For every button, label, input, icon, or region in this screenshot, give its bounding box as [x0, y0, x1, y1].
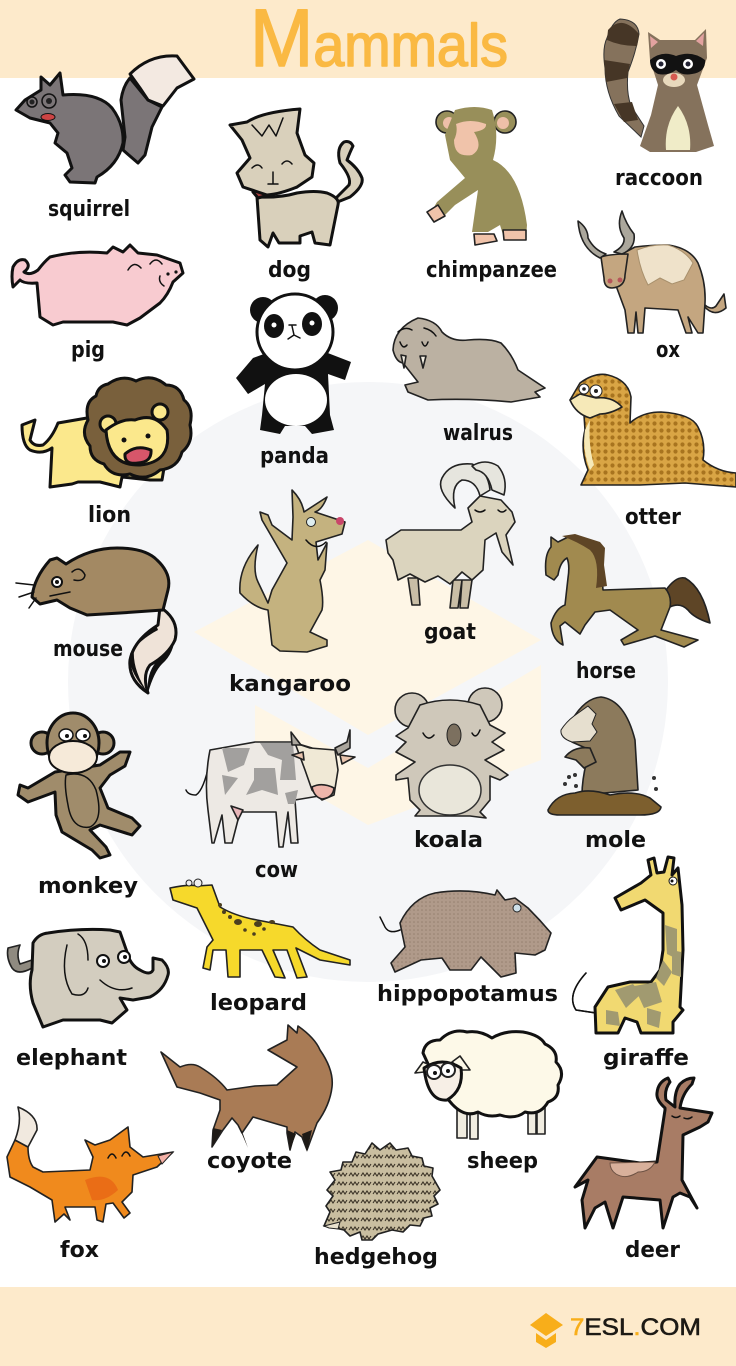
animal: giraffe — [573, 857, 689, 1071]
label: hippopotamus: hippopotamus — [377, 982, 558, 1007]
animal: walrus — [393, 318, 545, 446]
animal: cow — [186, 730, 355, 883]
label: chimpanzee: chimpanzee — [426, 258, 557, 283]
label: horse: horse — [576, 659, 636, 684]
animal: hedgehog — [314, 1143, 440, 1270]
animal: chimpanzee — [426, 107, 557, 283]
animal: panda — [236, 294, 351, 469]
animal: lion — [22, 378, 191, 528]
animal: koala — [395, 688, 508, 853]
animal: dog — [230, 109, 362, 283]
label: mole: mole — [585, 828, 646, 853]
label: hedgehog: hedgehog — [314, 1245, 438, 1270]
animal: coyote — [161, 1025, 332, 1174]
label: kangaroo: kangaroo — [229, 672, 351, 697]
label: fox: fox — [60, 1238, 99, 1263]
label: sheep: sheep — [467, 1149, 538, 1174]
animal: elephant — [8, 929, 168, 1071]
label: cow: cow — [255, 858, 298, 883]
animal: goat — [386, 462, 515, 645]
animal: horse — [546, 534, 710, 684]
label: coyote: coyote — [207, 1149, 292, 1174]
animal: fox — [7, 1107, 173, 1263]
animal: pig — [12, 245, 183, 363]
icon: graduation cap — [530, 1313, 563, 1348]
label: koala: koala — [414, 828, 483, 853]
animal: sheep — [415, 1031, 562, 1174]
animal: squirrel — [16, 56, 194, 222]
animal: monkey — [18, 713, 140, 899]
animal: deer — [575, 1078, 712, 1263]
animal: raccoon — [604, 19, 714, 191]
watermark logo — [194, 540, 541, 825]
animal: ox — [578, 211, 726, 363]
label: lion: lion — [88, 503, 131, 528]
header band — [0, 0, 736, 78]
animal: otter — [570, 374, 736, 530]
label: dog: dog — [268, 258, 311, 283]
label: otter: otter — [625, 505, 681, 530]
label: squirrel: squirrel — [48, 197, 130, 222]
animal: mouse — [16, 548, 176, 693]
label: pig: pig — [71, 338, 105, 363]
label: ox: ox — [656, 338, 680, 363]
animal: mole — [548, 697, 661, 853]
label: deer: deer — [625, 1238, 680, 1263]
label: giraffe: giraffe — [603, 1046, 689, 1071]
label: panda: panda — [260, 444, 329, 469]
animal: kangaroo — [229, 490, 351, 697]
label: walrus: walrus — [443, 421, 513, 446]
label: goat: goat — [424, 620, 476, 645]
label: raccoon: raccoon — [615, 166, 703, 191]
label: elephant: elephant — [16, 1046, 127, 1071]
label: monkey: monkey — [38, 874, 138, 899]
animal: leopard — [170, 879, 350, 1016]
logo: 7ESL.COM — [530, 1313, 701, 1348]
watermark circle — [68, 382, 668, 982]
footer band — [0, 1287, 736, 1366]
animal: hippopotamus — [377, 890, 558, 1007]
label: leopard: leopard — [210, 991, 307, 1016]
label: mouse: mouse — [53, 637, 123, 662]
logo text: 7ESL.COM — [570, 1314, 701, 1341]
